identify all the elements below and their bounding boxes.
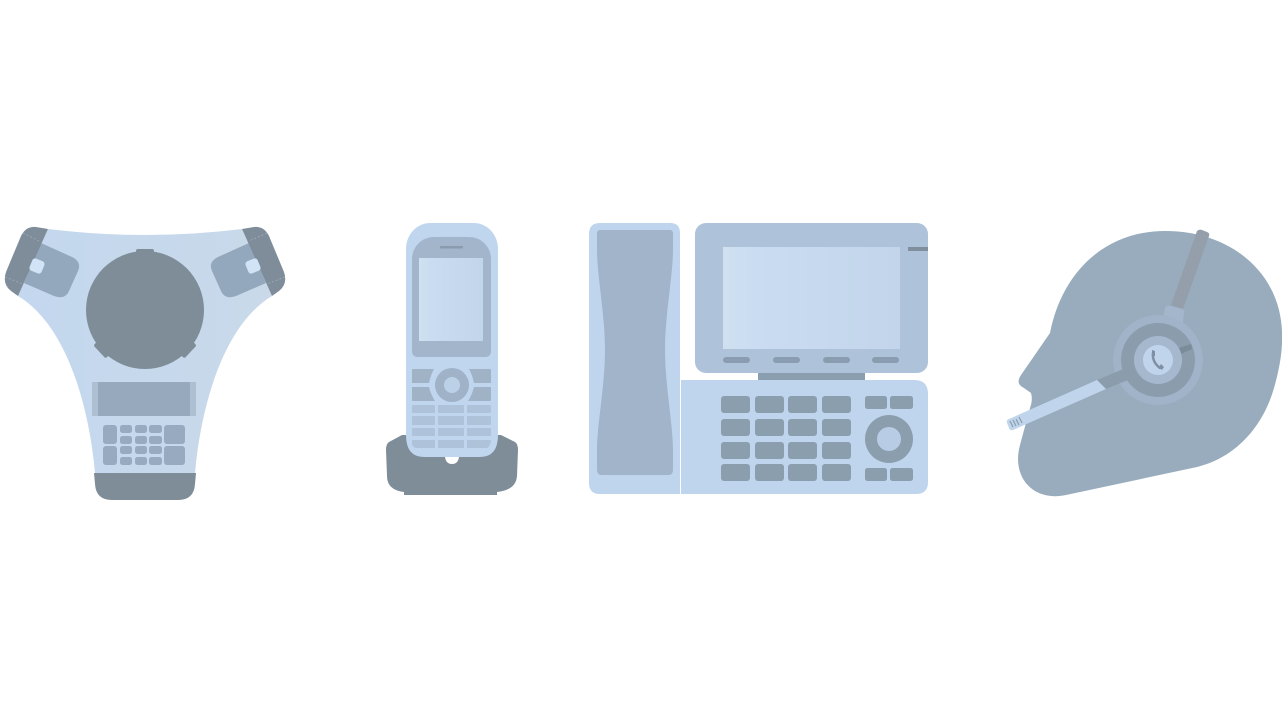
icon: desk phone xyxy=(589,223,928,494)
microphone boom xyxy=(1007,380,1106,430)
number keys xyxy=(412,405,491,448)
conference phone body xyxy=(18,229,272,473)
top antenna xyxy=(441,223,463,227)
receiver cradle xyxy=(589,223,680,494)
band connector xyxy=(1162,306,1184,322)
left indicator light xyxy=(29,258,45,274)
charger cradle xyxy=(386,435,518,495)
screen xyxy=(419,258,483,341)
base xyxy=(94,473,196,500)
phone glyph xyxy=(1153,353,1160,368)
boom arm xyxy=(1097,369,1128,389)
monitor screen xyxy=(723,247,900,349)
navigation ring xyxy=(435,368,469,402)
screen housing xyxy=(412,237,491,357)
arm cap seams xyxy=(5,233,285,284)
speaker grille circle xyxy=(86,249,204,369)
right arm cap xyxy=(242,227,285,296)
left arm cap xyxy=(5,227,48,296)
monitor housing xyxy=(695,223,928,373)
earpiece xyxy=(1113,315,1203,405)
dial pad xyxy=(721,396,851,481)
icon: head with headset xyxy=(1007,230,1282,496)
head silhouette xyxy=(1018,231,1282,496)
receiver xyxy=(597,230,673,475)
left speaker pad xyxy=(24,243,79,297)
icon: cordless handset on charger xyxy=(386,223,518,495)
monitor soft keys xyxy=(723,357,899,363)
headband xyxy=(1171,230,1209,309)
soft keys xyxy=(412,369,491,401)
right indicator light xyxy=(245,258,261,274)
function keys xyxy=(865,396,913,481)
navigation wheel xyxy=(865,415,913,463)
phone base xyxy=(681,380,928,494)
display xyxy=(92,382,196,416)
charging notch xyxy=(445,457,459,464)
monitor stand xyxy=(758,373,865,381)
handset body xyxy=(406,223,498,457)
earpiece xyxy=(440,246,463,248)
icon: conference phone xyxy=(5,227,285,500)
right speaker pad xyxy=(211,243,266,297)
microphone grille xyxy=(1010,417,1022,427)
monitor indicator xyxy=(908,247,928,251)
keypad xyxy=(103,425,185,465)
